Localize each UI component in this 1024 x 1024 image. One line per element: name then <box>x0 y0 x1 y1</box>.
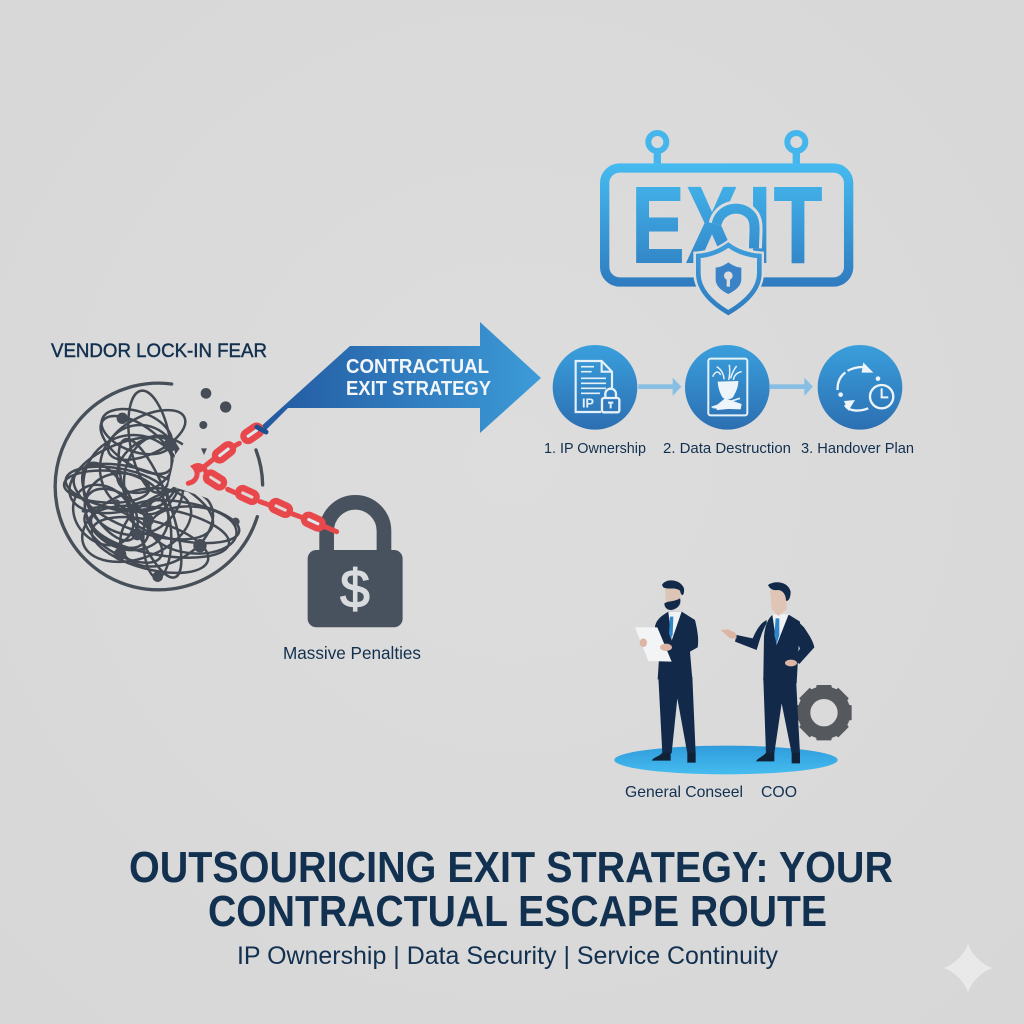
EXIT word: E <box>632 165 684 285</box>
step labels: 3. Handover Plan <box>801 440 914 457</box>
step 2 icon: shredded hard drive <box>685 345 770 430</box>
step labels <box>544 440 914 457</box>
chain end joining arrow <box>257 427 266 432</box>
padlock shackle <box>327 502 384 552</box>
sign hanger rings <box>648 133 805 165</box>
heading: vendor lock-in fear: VENDOR LOCK-IN FEAR <box>51 340 267 362</box>
sparkle watermark <box>944 944 992 992</box>
tangled vendor lock-in circle <box>55 383 263 590</box>
step labels: 1. IP Ownership <box>544 440 646 457</box>
step 1 icon: IP document and lock <box>553 345 637 430</box>
label: massive penalties: Massive Penalties <box>283 643 421 663</box>
subtitle: IP Ownership | Data Security | Service Continuity <box>237 942 778 970</box>
labels: general counsel and COO <box>625 784 797 801</box>
connector arrow 2 <box>770 378 813 396</box>
shield with keyhole <box>693 239 764 319</box>
padlock body <box>308 550 403 627</box>
EXIT word: T <box>774 165 822 285</box>
exit steps <box>553 345 902 430</box>
tangle of lines <box>59 387 242 584</box>
blue floor disc <box>614 746 838 774</box>
COO figure <box>721 582 814 763</box>
arrow label <box>346 355 491 400</box>
step 1 icon: IP document and lock: IP <box>582 397 595 411</box>
step 3 icon: handover cycle and clock <box>818 345 902 430</box>
arrow label: EXIT STRATEGY <box>346 377 491 400</box>
red broken chain <box>188 424 337 532</box>
general counsel figure <box>635 580 698 763</box>
arrow label: CONTRACTUAL <box>346 355 489 378</box>
title: OUTSOURICING EXIT STRATEGY: YOUR <box>129 844 893 892</box>
gear icon <box>796 685 852 740</box>
executives illustration <box>614 580 852 774</box>
padlock with dollar sign <box>308 502 403 627</box>
dollar sign: $ <box>340 560 370 619</box>
title <box>129 844 893 936</box>
title: CONTRACTUAL ESCAPE ROUTE <box>208 888 827 936</box>
tangle nodes and scattered dots <box>82 388 240 582</box>
EXIT word: X <box>687 165 737 285</box>
sign frame <box>605 168 849 282</box>
open padlock shackle <box>717 209 755 248</box>
connector arrow 1 <box>638 378 681 396</box>
EXIT word <box>632 165 822 285</box>
exit sign <box>605 133 849 319</box>
step labels: 2. Data Destruction <box>663 440 791 457</box>
contractual exit strategy arrow <box>257 322 541 434</box>
EXIT word: I <box>748 165 771 285</box>
labels: general counsel and COO: General Conseel <box>625 784 743 801</box>
outer broken ring <box>55 383 263 590</box>
labels: general counsel and COO: COO <box>761 784 797 801</box>
